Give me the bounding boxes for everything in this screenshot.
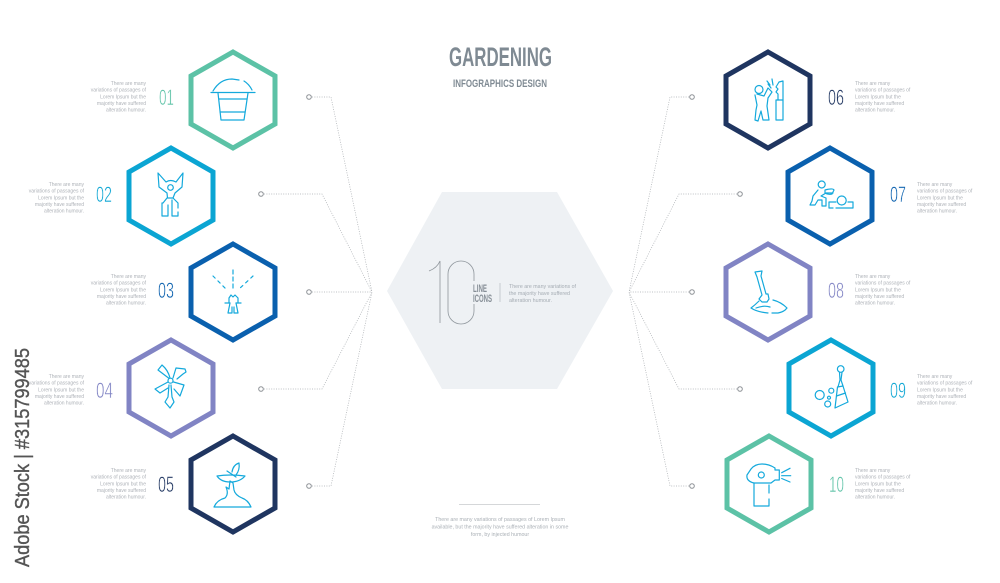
description 04: Lorem Ipsum but the xyxy=(38,387,84,393)
bottom note xyxy=(432,504,568,538)
description 09: alteration humour. xyxy=(917,401,957,407)
large number 10 outline xyxy=(429,261,474,324)
icon: bucket xyxy=(211,79,255,120)
description 05: variations of passages of xyxy=(91,475,147,481)
description 07 xyxy=(917,182,973,215)
description 08: majority have suffered xyxy=(855,294,904,300)
item 05 xyxy=(91,436,275,532)
description 02: Lorem Ipsum but the xyxy=(38,195,84,201)
description 07: variations of passages of xyxy=(917,189,973,195)
description 10 xyxy=(855,468,911,501)
description 04: There are many xyxy=(49,374,84,380)
icon: pinwheel xyxy=(155,365,186,408)
description 04 xyxy=(29,374,85,407)
number 01: 01 xyxy=(159,85,174,110)
icon: gardener planting xyxy=(810,181,853,208)
description 07: alteration humour. xyxy=(917,209,957,215)
description 04: alteration humour. xyxy=(44,401,84,407)
description 05: majority have suffered xyxy=(97,488,146,494)
bottom note: There are many variations of passages of Lorem Ipsum xyxy=(435,517,566,523)
line icons label: LINE xyxy=(473,283,487,295)
icon: person trimming hedge xyxy=(755,79,783,121)
central description: There are many variations of xyxy=(509,284,576,290)
description 09: Lorem Ipsum but the xyxy=(917,387,963,393)
description 01: There are many xyxy=(111,81,146,87)
central description: the majority have suffered xyxy=(509,291,570,297)
description 09: There are many xyxy=(917,374,953,380)
description 05: alteration humour. xyxy=(106,495,146,501)
number 07: 07 xyxy=(890,182,906,207)
icon: broom and seeds xyxy=(815,366,848,408)
description 02: majority have suffered xyxy=(35,202,84,208)
description 08: alteration humour. xyxy=(855,301,895,307)
bottom note: available, but the majority have suffered alteration in some xyxy=(432,524,568,530)
description 03: Lorem Ipsum but the xyxy=(100,287,146,293)
description 01: variations of passages of xyxy=(91,88,147,94)
description 03: alteration humour. xyxy=(106,301,146,307)
description 06: Lorem Ipsum but the xyxy=(855,94,901,100)
description 06: variations of passages of xyxy=(855,88,911,94)
number 03: 03 xyxy=(158,278,174,303)
description 01 xyxy=(91,81,147,114)
description 02: variations of passages of xyxy=(29,189,85,195)
description 10: alteration humour. xyxy=(855,495,895,501)
description 10: variations of passages of xyxy=(855,475,911,481)
description 06: alteration humour. xyxy=(855,108,895,114)
line icons label xyxy=(473,283,492,305)
description 05: Lorem Ipsum but the xyxy=(100,481,146,487)
description 07: There are many xyxy=(917,182,953,188)
item 07 xyxy=(788,148,973,244)
description 03: majority have suffered xyxy=(97,294,146,300)
number 09: 09 xyxy=(890,378,906,403)
description 05 xyxy=(91,468,147,501)
description 06 xyxy=(855,81,911,114)
description 02 xyxy=(29,182,85,215)
item 08 xyxy=(726,244,911,340)
description 01: Lorem Ipsum but the xyxy=(100,94,146,100)
description 10: Lorem Ipsum but the xyxy=(855,481,901,487)
description 02: There are many xyxy=(49,182,84,188)
icon: plant sprout xyxy=(214,463,251,507)
description 01: alteration humour. xyxy=(106,108,146,114)
description 08: There are many xyxy=(855,274,891,280)
description 02: alteration humour. xyxy=(44,209,84,215)
central description: alteration humour. xyxy=(509,298,552,304)
description 10: majority have suffered xyxy=(855,488,904,494)
item 01 xyxy=(91,52,275,148)
description 07: Lorem Ipsum but the xyxy=(917,195,963,201)
description 07: majority have suffered xyxy=(917,202,966,208)
title: GARDENING xyxy=(449,42,552,72)
item 03 xyxy=(91,244,275,340)
icon: sprinkler xyxy=(213,270,253,313)
central hexagon panel xyxy=(387,192,613,389)
description 03 xyxy=(91,274,147,307)
connector lines xyxy=(259,95,742,488)
item 09 xyxy=(789,340,973,436)
description 04: majority have suffered xyxy=(35,394,84,400)
description 10: There are many xyxy=(855,468,891,474)
description 08: variations of passages of xyxy=(855,281,911,287)
description 06: majority have suffered xyxy=(855,101,904,107)
description 08: Lorem Ipsum but the xyxy=(855,287,901,293)
description 03: variations of passages of xyxy=(91,281,147,287)
number 04: 04 xyxy=(96,378,113,403)
number 06: 06 xyxy=(828,85,844,110)
item 04 xyxy=(29,340,213,436)
icon: pruning shears xyxy=(158,173,183,216)
item 02 xyxy=(29,148,213,244)
number 10: 10 xyxy=(829,472,844,497)
description 01: majority have suffered xyxy=(97,101,146,107)
item 10 xyxy=(727,436,911,532)
description 05: There are many xyxy=(111,468,146,474)
central description xyxy=(509,284,576,304)
description 09: majority have suffered xyxy=(917,394,966,400)
icon: hose spray nozzle xyxy=(747,464,791,506)
number 08: 08 xyxy=(828,278,844,303)
icon: shovel in soil xyxy=(751,271,787,313)
subtitle: INFOGRAPHICS DESIGN xyxy=(453,78,547,90)
number 02: 02 xyxy=(96,182,112,207)
description 08 xyxy=(855,274,911,307)
line icons label: ICONS xyxy=(473,293,492,305)
item 06 xyxy=(726,52,911,148)
description 04: variations of passages of xyxy=(29,381,85,387)
number 05: 05 xyxy=(158,472,174,497)
description 09: variations of passages of xyxy=(917,381,973,387)
bottom note: form, by injected humour xyxy=(471,532,529,538)
description 09 xyxy=(917,374,973,407)
description 06: There are many xyxy=(855,81,891,87)
description 03: There are many xyxy=(111,274,146,280)
vertical stock id text: Adobe Stock | #315799485 xyxy=(12,348,34,567)
